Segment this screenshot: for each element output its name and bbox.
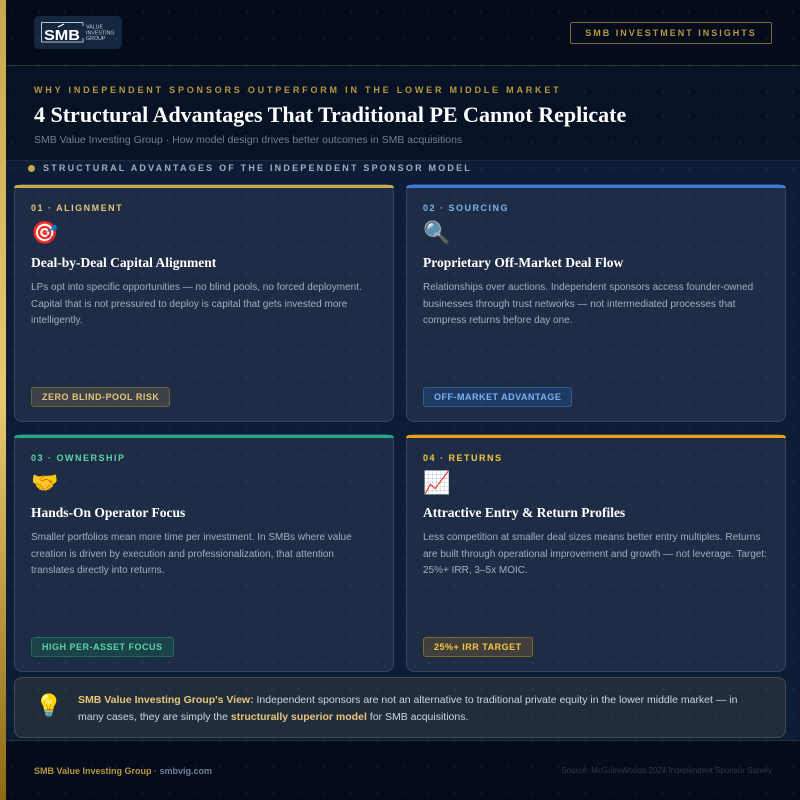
callout text: SMB Value Investing Group's View: Independent sponsors are not an alternative to traditional private equity in the lower middle market — in many cases, they are simply the structurally superior model for SMB acquisitions. [78,694,737,723]
icon: chart: 📈 [423,471,450,496]
icon: light bulb: 💡 [35,694,62,719]
card badge [423,637,533,657]
card badge: ZERO BLIND-POOL RISK [42,392,159,402]
card badge: OFF-MARKET ADVANTAGE [434,392,561,402]
panel: returns: 04 · RETURNS [423,453,503,463]
card heading: Hands-On Operator Focus [31,505,185,520]
card heading: Deal-by-Deal Capital Alignment [31,255,216,270]
logo: GROUP [86,36,106,42]
title: 4 Structural Advantages That Traditional PE Cannot Replicate [34,102,626,127]
footer [0,740,800,800]
card body: LPs opt into specific opportunities — no blind pools, no forced deployment. Capital that is not pressured to deploy is capital that gets invested more intelligently. [31,282,362,326]
logo: VALUE [86,24,103,30]
card badge [31,637,174,657]
panel: alignment: 01 · ALIGNMENT [31,203,123,213]
header badge [570,22,772,44]
card heading: Proprietary Off-Market Deal Flow [423,255,623,270]
card heading: Attractive Entry & Return Profiles [423,505,625,520]
icon: handshake: 🤝 [31,471,58,496]
eyebrow: WHY INDEPENDENT SPONSORS OUTPERFORM IN THE LOWER MIDDLE MARKET [34,85,561,95]
card badge: HIGH PER-ASSET FOCUS [42,642,163,652]
hero section [0,66,800,161]
card body: Less competition at smaller deal sizes means better entry multiples. Returns are built through operational improvement and growth — not leverage. Target: 25%+ IRR, 3–5x MOIC. [423,532,767,576]
icon: target: 🎯 [31,221,58,246]
logo [34,16,122,49]
footer left text: SMB Value Investing Group · smbvig.com [34,766,212,776]
panel: sourcing: 02 · SOURCING [423,203,509,213]
panel: sourcing [406,184,786,422]
section label: STRUCTURAL ADVANTAGES OF THE INDEPENDENT SPONSOR MODEL [43,163,472,173]
footer source: Source: McGuireWoods 2024 Independent Sponsor Survey [561,766,772,775]
card body: Smaller portfolios mean more time per investment. In SMBs where value creation is driven by execution and professionalization, that attention translates directly into returns. [31,532,352,576]
logo: SMB [44,27,80,44]
panel: ownership [14,434,394,672]
callout [14,677,786,738]
header badge: SMB INVESTMENT INSIGHTS [585,28,757,38]
left gold accent bar [0,0,6,800]
panel: ownership: 03 · OWNERSHIP [31,453,126,463]
icon: magnifier: 🔍 [423,221,450,246]
logo: INVESTING [86,30,115,36]
subtitle: SMB Value Investing Group · How model design drives better outcomes in SMB acquisitions [34,134,462,146]
card badge [31,387,170,407]
card badge: 25%+ IRR TARGET [434,642,522,652]
panel: returns [406,434,786,672]
panel: alignment [14,184,394,422]
card badge [423,387,572,407]
header bar [0,0,800,66]
card body: Relationships over auctions. Independent sponsors access founder-owned businesses through trust networks — not intermediated processes that compress returns before day one. [423,282,753,326]
